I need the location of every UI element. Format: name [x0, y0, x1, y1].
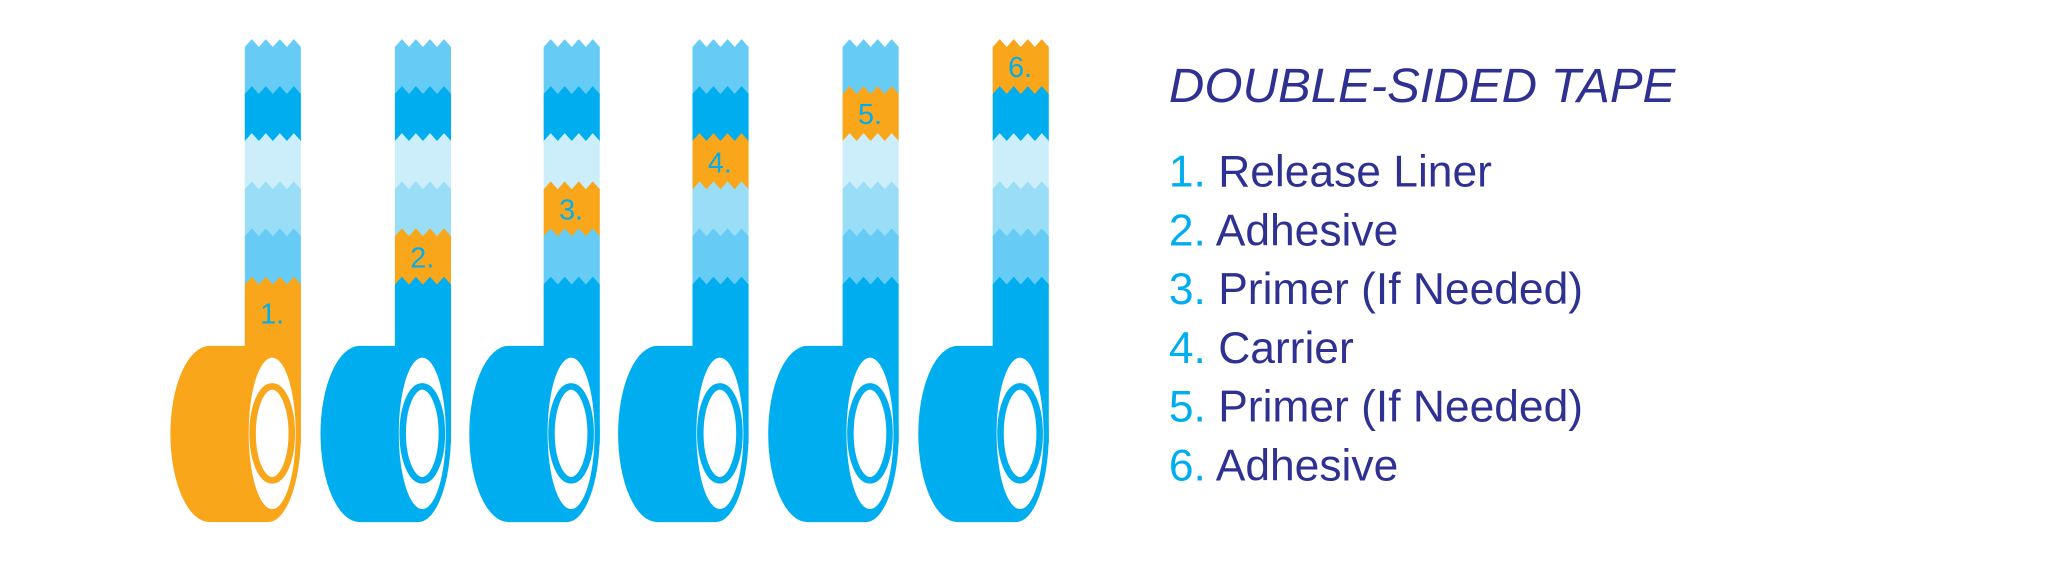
tape 1: 1. — [260, 299, 284, 331]
legend list: 4. Carrier — [1169, 324, 1354, 373]
tape 1 — [170, 39, 301, 522]
tape 2 — [320, 39, 451, 522]
legend list: 3. Primer (If Needed) — [1169, 265, 1583, 314]
legend list — [1169, 148, 1583, 490]
tape 6: 6. — [1008, 52, 1032, 84]
tape 6 — [918, 39, 1049, 522]
legend list: 6. Adhesive — [1169, 441, 1398, 490]
tape 4 — [618, 39, 749, 522]
tape 3 — [469, 39, 600, 522]
legend list: 2. Adhesive — [1169, 206, 1398, 255]
legend list: 5. Primer (If Needed) — [1169, 383, 1583, 432]
tape 5 — [768, 39, 899, 522]
tape 2: 2. — [410, 243, 434, 275]
title: DOUBLE-SIDED TAPE — [1169, 59, 1676, 113]
tape 4: 4. — [708, 147, 732, 179]
legend list: 1. Release Liner — [1169, 148, 1492, 197]
tape 5: 5. — [858, 99, 882, 131]
tape 3: 3. — [559, 194, 583, 226]
